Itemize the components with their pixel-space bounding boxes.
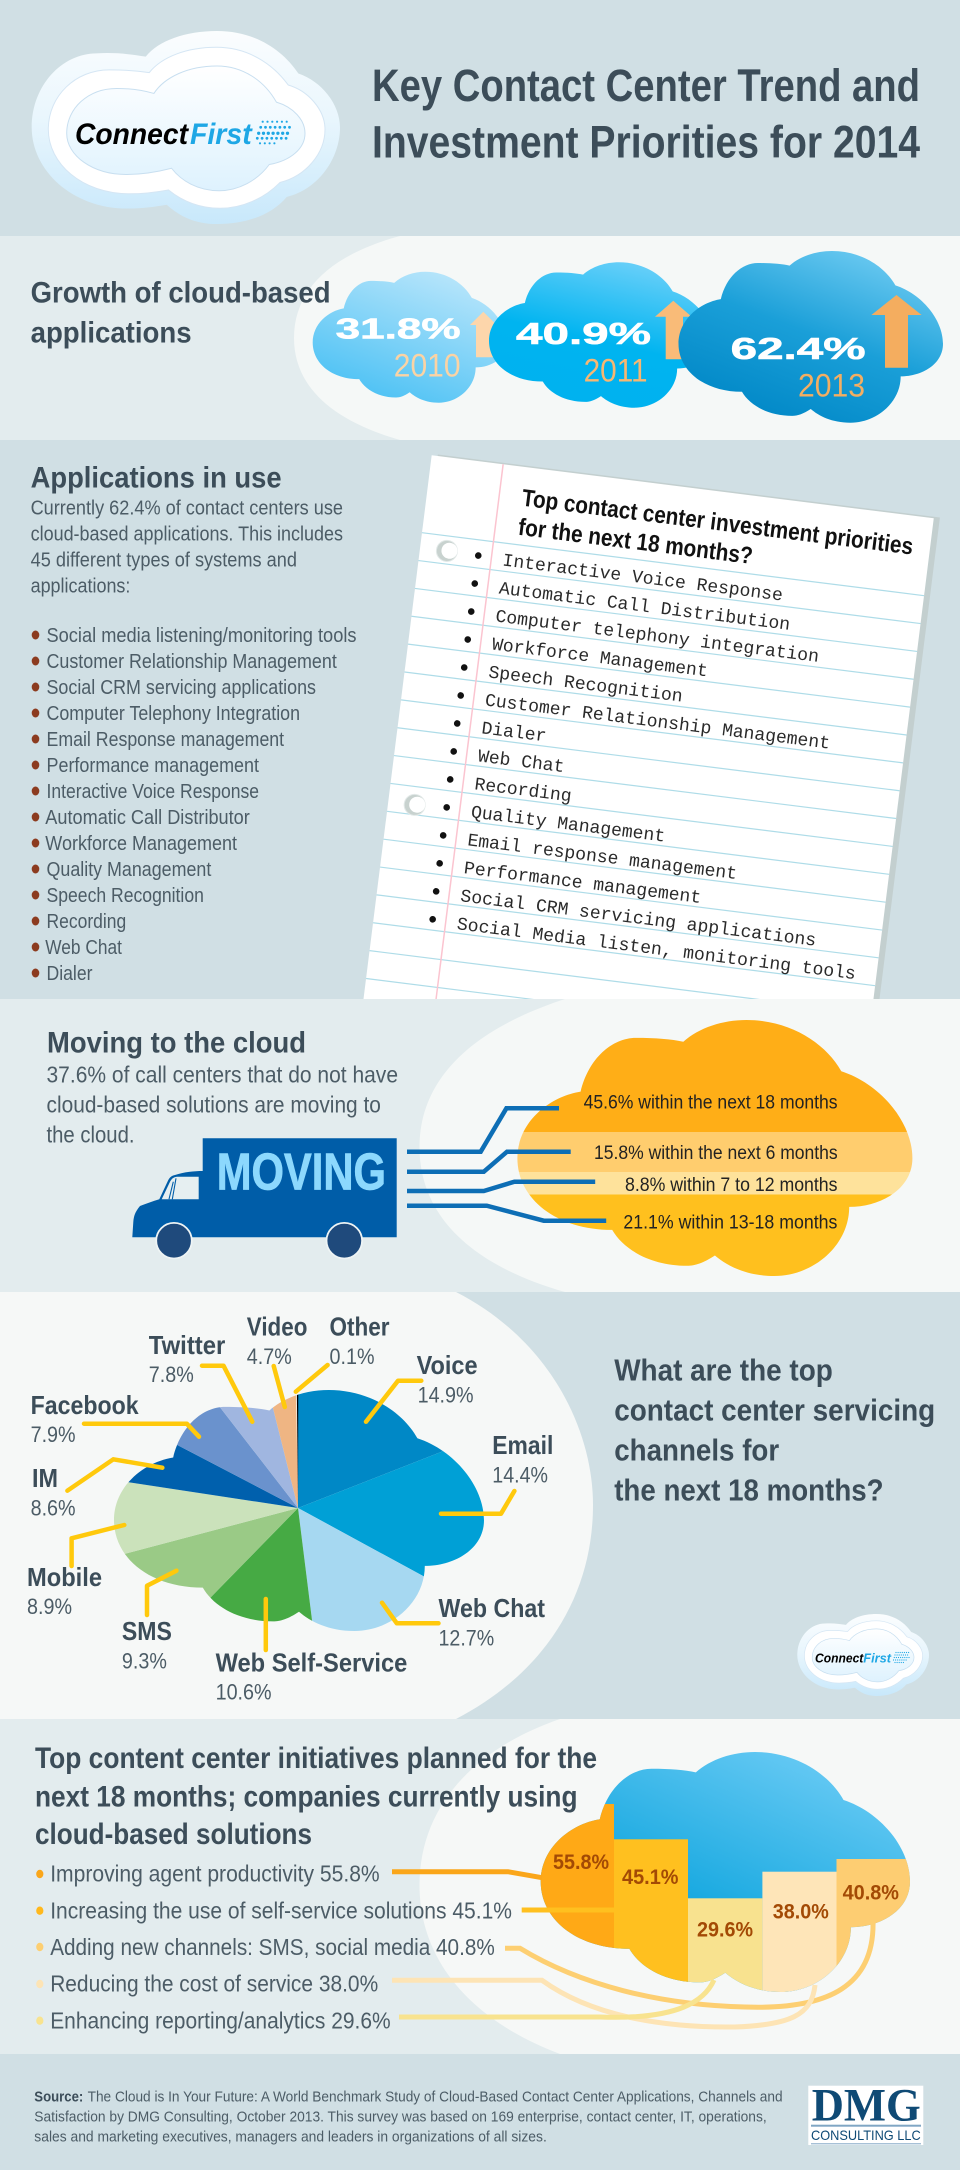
label: Video [247, 1312, 307, 1369]
list: priorities: Recording [473, 775, 573, 807]
logo: small ConnectFirst cloud: Connect [815, 1650, 864, 1665]
panel: growth of cloud-based applications [0, 236, 960, 440]
list: applications [32, 625, 356, 985]
list: priorities: Social CRM servicing applications [459, 887, 817, 952]
label: Web Self-Service [216, 1648, 407, 1705]
list: applications: Automatic Call Distributor [45, 807, 250, 829]
panel: header [0, 0, 960, 236]
list: initiatives: Increasing the use of self-service solutions 45.1% [50, 1897, 512, 1923]
heading: growth: applications [31, 316, 192, 349]
label: Video: Video [247, 1312, 307, 1342]
text block: source: Source: [34, 2089, 83, 2106]
list: priorities: Customer Relationship Management [484, 691, 831, 755]
heading: growth: Growth of cloud-based [31, 276, 331, 309]
heading: notepaper title: for the next 18 months? [517, 514, 754, 570]
leader lines [67, 1365, 514, 1650]
icon: punch hole top [435, 539, 459, 563]
label: Email: Email [492, 1430, 553, 1460]
cloud: moving timeline bands [510, 1015, 920, 1284]
chart: initiatives cloud columns: 55.8% [553, 1851, 609, 1874]
label: Web Chat: 12.7% [438, 1626, 494, 1651]
logo: ConnectFirst cloud: Connect [75, 118, 190, 151]
list: initiatives: Enhancing reporting/analytics 29.6% [50, 2007, 391, 2033]
panel: footer source [0, 2054, 960, 2170]
label: IM: IM [32, 1463, 58, 1493]
cloud: 2010 [313, 272, 507, 403]
cloud: moving timeline bands: 15.8% within the next 6 months [594, 1143, 838, 1164]
cloud: 2010: 2010 [394, 348, 460, 384]
chart: initiatives cloud columns: 38.0% [773, 1900, 829, 1923]
label: SMS: 9.3% [122, 1649, 167, 1674]
heading: growth [31, 276, 331, 349]
label: Facebook [31, 1390, 139, 1447]
logo: DMG Consulting: DMG [812, 2080, 921, 2132]
label: Voice: 14.9% [418, 1383, 474, 1408]
list: priorities: Social Media listen, monitoring tools [456, 915, 857, 985]
cloud: moving timeline bands: 21.1% within 13-18 months [623, 1212, 837, 1233]
panel: moving to the cloud [0, 999, 960, 1292]
heading: top servicing channels question: channels for [614, 1433, 779, 1468]
list: priorities: Interactive Voice Response [501, 552, 784, 607]
cloud: 2010: 31.8% [336, 313, 461, 345]
chart: initiatives cloud columns: 45.1% [622, 1866, 679, 1889]
chart: initiatives cloud columns: 40.8% [843, 1881, 899, 1904]
list: initiatives [36, 1861, 512, 2033]
list: initiatives: Reducing the cost of service 38.0% [50, 1971, 378, 1997]
icon: moving truck [132, 1138, 397, 1258]
list: applications: Interactive Voice Response [46, 781, 259, 803]
cloud: 2011: 40.9% [516, 316, 651, 351]
notepaper: investment priorities [351, 454, 940, 1164]
cloud: 2013: 62.4% [731, 331, 866, 366]
text block: source [34, 2089, 783, 2146]
list: applications: Social media listening/monitoring tools [46, 625, 356, 647]
list: applications: Performance management [46, 755, 259, 777]
list: priorities: Dialer [480, 719, 547, 747]
list: priorities: Quality Management [470, 803, 666, 848]
logo: small ConnectFirst cloud [797, 1614, 929, 1696]
list: initiatives: Improving agent productivity 55.8% [50, 1861, 380, 1887]
connector lines: truck to cloud [407, 1108, 606, 1221]
heading: moving: Moving to the cloud [47, 1027, 306, 1060]
heading: initiatives: cloud-based solutions [35, 1818, 312, 1851]
logo: ConnectFirst cloud [32, 31, 340, 224]
list: priorities: Performance management [463, 859, 702, 909]
panel: top initiatives [0, 1719, 960, 2054]
label: Mobile: 8.9% [27, 1594, 72, 1619]
list: applications: Web Chat [45, 937, 122, 959]
cloud: 2011: 2011 [584, 353, 648, 389]
list: priorities: Speech Recognition [487, 663, 684, 708]
text block: applications intro: applications: [31, 576, 130, 598]
text block: source: The Cloud is In Your Future: A World Benchmark Study of Cloud-Based Contact Center Applications, Channels and [88, 2089, 783, 2106]
label: Web Chat [438, 1593, 545, 1651]
text block: applications intro: cloud-based applications. This includes [31, 523, 343, 545]
list: priorities: Computer telephony integration [494, 607, 820, 668]
label: Twitter: Twitter [149, 1330, 225, 1360]
list: applications: Workforce Management [45, 833, 237, 855]
chart: initiatives cloud columns [535, 1752, 914, 2004]
list: initiatives: Adding new channels: SMS, social media 40.8% [50, 1934, 495, 1960]
text block: source: sales and marketing executives, managers and leaders in organizations of all sizes. [34, 2129, 547, 2146]
chart: channels pie in cloud [28, 1316, 552, 1700]
list: priorities: Web Chat [477, 747, 565, 778]
label: Mobile: Mobile [27, 1562, 102, 1592]
list: priorities [428, 548, 902, 985]
text block: moving [46, 1062, 398, 1148]
label: Email [492, 1430, 553, 1488]
text block: moving: 37.6% of call centers that do not have [46, 1062, 398, 1088]
label: Mobile [27, 1562, 102, 1619]
list: applications: Quality Management [46, 859, 212, 881]
cloud: moving timeline bands: 8.8% within 7 to 12 months [625, 1175, 838, 1196]
heading: initiatives: Top content center initiatives planned for the [35, 1742, 597, 1775]
logo: small ConnectFirst cloud: First [863, 1650, 892, 1665]
label: Other: Other [330, 1312, 390, 1342]
text block: applications intro: Currently 62.4% of contact centers use [31, 498, 343, 520]
list: priorities: Email response management [466, 831, 738, 885]
cloud: moving timeline bands: 45.6% within the next 18 months [584, 1092, 838, 1113]
label: Facebook: Facebook [31, 1390, 139, 1420]
icon: moving truck: MOVING [217, 1143, 386, 1201]
list: applications: Customer Relationship Management [46, 651, 337, 673]
label: Web Self-Service: Web Self-Service [216, 1648, 407, 1678]
label: Voice [417, 1350, 478, 1408]
label: Twitter: 7.8% [149, 1362, 194, 1387]
list: applications: Recording [46, 911, 126, 933]
text block: moving: cloud-based solutions are moving to [46, 1092, 381, 1118]
heading: applications in use: Applications in use [31, 461, 282, 494]
label: SMS [122, 1616, 172, 1674]
label: Voice: Voice [417, 1350, 478, 1380]
logo: DMG Consulting: CONSULTING LLC [811, 2127, 921, 2143]
label: Video: 4.7% [247, 1344, 292, 1369]
list: applications: Dialer [46, 963, 93, 985]
panel: applications in use [0, 440, 960, 1164]
list: applications: Email Response management [46, 729, 284, 751]
label: IM [31, 1463, 76, 1521]
cloud: 2011 [489, 262, 713, 408]
label: Web Self-Service: 10.6% [216, 1680, 272, 1705]
text block: applications intro [31, 498, 343, 598]
heading: top servicing channels question: the next 18 months? [614, 1473, 884, 1508]
list: applications: Social CRM servicing applications [46, 677, 316, 699]
heading: initiatives: next 18 months; companies currently using [35, 1781, 578, 1814]
text block: applications intro: 45 different types of systems and [31, 550, 297, 572]
label: Facebook: 7.9% [31, 1422, 76, 1447]
label: Other: 0.1% [330, 1344, 374, 1369]
label: Email: 14.4% [492, 1463, 548, 1488]
panel: servicing channels [0, 1292, 934, 1719]
label: Other [330, 1312, 390, 1369]
text block: moving: the cloud. [46, 1122, 134, 1148]
cloud: 2013: 2013 [798, 368, 865, 404]
heading: top servicing channels question [614, 1353, 935, 1508]
list: priorities: Automatic Call Distribution [498, 580, 791, 636]
label: IM: 8.6% [31, 1496, 76, 1521]
list: applications: Speech Recognition [46, 885, 204, 907]
cloud: 2013 [678, 251, 943, 423]
label: Twitter [149, 1330, 225, 1387]
label: SMS: SMS [122, 1616, 172, 1646]
icon: punch hole bottom [403, 793, 426, 817]
text block: source: Satisfaction by DMG Consulting, October 2013. This survey was based on 169 enterprise, contact center, IT, operations, [34, 2109, 767, 2126]
chart: initiatives cloud columns: 29.6% [697, 1919, 753, 1942]
title [372, 60, 920, 167]
heading: initiatives [35, 1742, 597, 1851]
label: Web Chat: Web Chat [438, 1593, 545, 1623]
logo: ConnectFirst cloud: First [190, 118, 254, 151]
connector lines: initiatives [392, 1872, 873, 2027]
heading: top servicing channels question: What are the top [614, 1353, 833, 1388]
list: priorities: Workforce Management [491, 635, 709, 682]
list: applications: Computer Telephony Integration [46, 703, 300, 725]
